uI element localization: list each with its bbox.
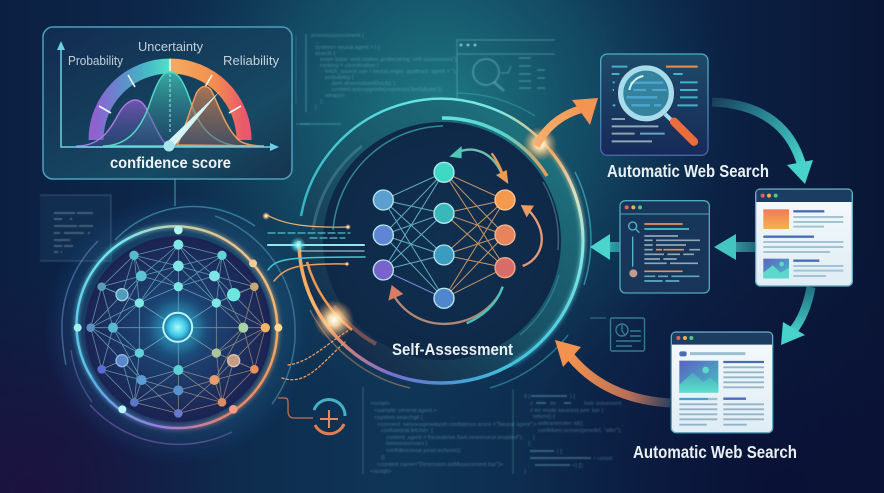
code block: bottom left: content: agent = focusalvise.flam.newsource.enabled"); [386,435,524,441]
ring arcs [299,93,591,388]
code block: bottom left: iamnousonvars } [386,441,427,447]
code block: top: content.autoupgrade(response('thefallutey')); [332,87,443,93]
code block: top: exam.base: web.station.probe(string 'self-assessment'); [320,57,458,63]
arrow: result page to lower page [781,287,811,345]
code block: bottom right: ) { [570,394,575,400]
network edges [91,245,265,413]
distribution curves [77,72,264,147]
code block: bottom left: confusional.fetcher: { [381,428,433,434]
arrow: core to web search [536,98,598,146]
label: Uncertainty: Uncertainty [138,39,203,54]
data streams between network and core [262,212,365,380]
network links [383,172,505,298]
code block: top: ranking = coordination { [320,63,379,69]
arrow: results back to core [555,340,670,403]
label: Reliability: Reliability [223,54,280,68]
lens flare: lower left [314,300,354,340]
code block: bottom right: | }; [557,449,564,455]
code block: bottom right: // ler mode.asuesist.see: ker { [530,408,604,414]
magnifier [621,68,694,142]
code block: bottom right: // [530,401,534,407]
code block: bottom right: if ( [524,394,530,400]
code block: bottom right: ler [550,401,556,407]
ghost code window: left [40,195,111,261]
card: code search window [620,201,709,293]
code block: bottom left: <content name="Dimension.selfAssessment.bar"}> [377,462,503,468]
code block: bottom left [363,387,537,475]
network nodes [373,162,515,308]
code block: top: }; [320,99,324,105]
code block: bottom right: confidueri.scoser(proxdel, "aller"); [538,428,622,434]
arrow: search to result page [712,102,813,184]
code block: top [300,33,458,124]
outer ring [77,226,277,428]
code block: top: system= neural.agent = t { [315,45,380,51]
code block: bottom left: <connect: nervousgrowtarsh confidence.score ="Neural agent";> [377,422,537,428]
card: article page [671,332,773,433]
label: Self-Assessment: Self-Assessment [392,341,513,359]
code block: top: search { [315,51,335,57]
label: Probability: Probability [68,54,124,68]
panel: confidence score [43,27,292,179]
code block: bottom left: <system searchgit { [374,415,423,421]
gauge arc [96,59,244,140]
network nodes [74,226,282,418]
code block: top: ... [315,39,320,45]
code block: bottom left: </script> [370,469,391,475]
network central hub [154,303,202,351]
label: confidence score: confidence score [110,155,231,172]
code block: top: probability { [325,75,354,81]
code block: bottom right: hols solvement [584,401,622,407]
arrow: code window to core [590,234,620,260]
code block: top: item.dnormalised(fetch); } [332,81,396,87]
code block: bottom left: confidencevue.pearr.echone(); [386,448,462,454]
code block: bottom left: }} [381,455,385,461]
code block: top: fetch_source.use / neural.origin, apattract: agent = "); [325,69,457,75]
code block: top: processassessment { [311,33,364,39]
card: result page [756,189,852,286]
code block: bottom right: }; [528,441,532,447]
code block: bottom right: } [524,469,526,475]
self-assessment core ring [299,93,591,388]
icon: plus badge with connector [278,398,345,434]
arrow: result page to code window [714,234,756,260]
feedback arrows [394,150,542,324]
code block: bottom right [513,389,622,475]
neural network diagram [373,146,542,324]
code block: top: } [315,105,317,111]
code block: bottom right: <} [}; [572,463,584,469]
ghost browser panel [457,40,555,118]
code block: bottom right: / celoid; [594,456,614,462]
label: Automatic Web Search (upper): Automatic Web Search [607,161,769,181]
label: Automatic Web Search (lower): Automatic Web Search [633,442,797,462]
gauge needle [164,91,220,152]
neural globe network [43,194,313,464]
code block: bottom left: <sample: several.agent > [374,408,437,414]
code block: top: weapon [324,93,345,99]
decorative outer arcs [62,207,295,444]
lens flares [523,127,557,161]
card: web search magnifier [601,54,708,155]
connector lines from the confidence panel [175,36,310,206]
chart axes [57,41,279,151]
code block: bottom right: ; [528,463,530,469]
ghost icon: report [590,318,644,351]
code block: bottom right: return() { [533,414,555,420]
code block: bottom right: softrameroler: id(); [538,421,584,427]
code block: bottom right: } [533,435,535,441]
code block: bottom left: <script> [370,401,390,407]
